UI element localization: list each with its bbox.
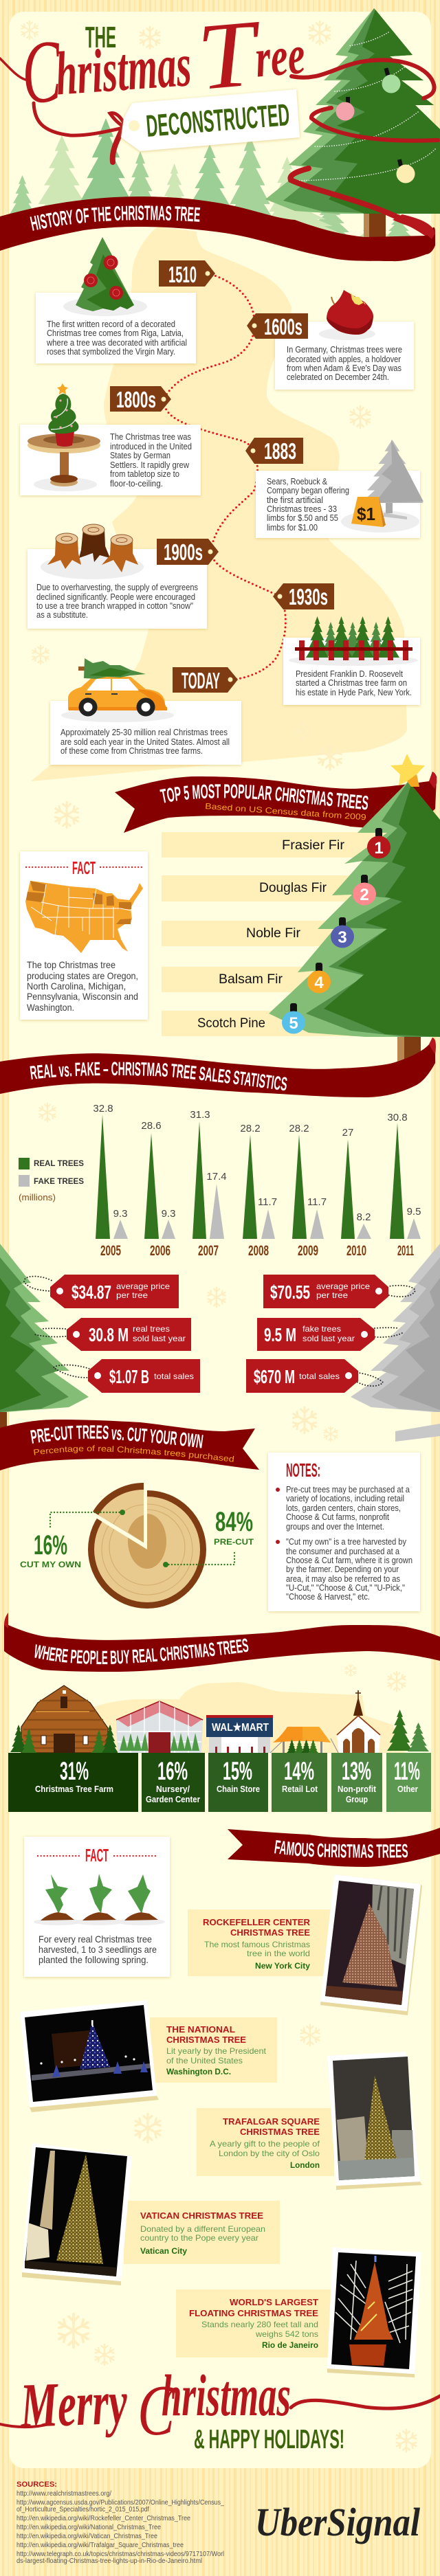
icon: snow xyxy=(41,555,144,579)
notes card xyxy=(268,1453,420,1611)
tag: real sales: total sales xyxy=(154,1371,194,1381)
merry christmas ribbon xyxy=(0,2396,440,2427)
fact card: map: North Carolina, Michigan, xyxy=(27,981,126,992)
ornament 1: 1 xyxy=(374,839,384,858)
trees: right of church xyxy=(387,1710,429,1751)
16 percent slice xyxy=(93,1483,144,1543)
text: Christmas tree comes from Riga, Latvia, xyxy=(47,328,184,338)
fact heading: FACT xyxy=(72,858,96,878)
tag: 1900s: 1900s xyxy=(164,539,203,565)
photo: national xyxy=(20,2000,159,2112)
card: today: Approximately 25-30 million real Christmas trees xyxy=(60,728,228,737)
icon: fence xyxy=(295,640,412,660)
famous: trafalgar: TRAFALGAR SQUARE xyxy=(223,2116,320,2127)
stat: other: Other xyxy=(397,1784,418,1794)
famous: rio: Stands nearly 280 feet tall and xyxy=(201,2320,318,2329)
photo: vatican xyxy=(22,2143,132,2285)
card: 1883: the first artificial xyxy=(267,495,323,505)
tag: 1883: 1883 xyxy=(264,438,296,464)
icon: price sign xyxy=(351,497,386,527)
stat: tree farm xyxy=(8,1753,138,1812)
notes card: Choose & Cut farm, where it is grown xyxy=(286,1556,412,1565)
sources: http://en.wikipedia.org/wiki/Rockefeller_Center_Christmas_Tree xyxy=(16,2515,190,2522)
stat: non-profit: Non-profit xyxy=(338,1784,377,1794)
card: 1800s: from tabletop size to xyxy=(110,469,179,479)
map of the USA xyxy=(25,881,143,953)
sand wave behind history timeline xyxy=(31,227,407,781)
famous: rockefeller: tree in the world xyxy=(247,1949,310,1958)
notes card: groups and over the Internet. xyxy=(286,1522,384,1532)
icon: tree stumps xyxy=(47,524,138,572)
sources: http://en.wikipedia.org/wiki/National_Christmas_Tree xyxy=(16,2524,161,2531)
legend xyxy=(19,1158,84,1202)
label: 16 percent: CUT MY OWN xyxy=(20,1560,81,1569)
years: 2011 xyxy=(397,1243,414,1259)
tag: real sold: real trees xyxy=(133,1324,170,1334)
stat bars: where people buy xyxy=(8,1753,431,1812)
icon: snow xyxy=(34,478,97,491)
years: 2008 xyxy=(248,1243,269,1259)
card: 1883: limbs for $.50 and 55 xyxy=(267,513,338,523)
stat: nursery: 16% xyxy=(157,1757,188,1785)
banner: real vs fake: REAL vs. FAKE – CHRISTMAS TREE SALES STATISTICS xyxy=(30,1062,287,1091)
text: roses that symbolized the Virgin Mary. xyxy=(47,347,175,357)
ornament 2: 2 xyxy=(360,886,369,904)
stat: nursery xyxy=(142,1753,205,1812)
photo: trafalgar xyxy=(327,2052,422,2190)
photo: rockefeller xyxy=(320,1874,422,2015)
sources: http://en.wikipedia.org/wiki/Vatican_Christmas_Tree xyxy=(16,2533,157,2540)
famous: trafalgar: A yearly gift to the people of xyxy=(210,2139,320,2149)
card: 1883: Company began offering xyxy=(267,486,349,495)
tag: fake price xyxy=(263,1275,388,1308)
notes card: Choose & Cut farms, nonprofit xyxy=(286,1512,389,1522)
ornament: pink xyxy=(336,97,355,121)
values: 8.2 xyxy=(357,1211,371,1223)
tag: fake sales: total sales xyxy=(299,1371,340,1381)
famous: national: THE NATIONAL xyxy=(166,2024,235,2035)
card: 1600s: celebrated on December 24th. xyxy=(287,372,389,382)
tag: 1510: 1510 xyxy=(168,262,197,287)
ornament 5 xyxy=(282,1003,305,1033)
famous: rio: weighs 542 tons xyxy=(255,2329,318,2339)
tree: fake (right) xyxy=(351,1244,440,1442)
stat: tree farm: 31% xyxy=(60,1757,89,1785)
icon: snow xyxy=(289,655,418,666)
top 5 tree xyxy=(269,754,440,1037)
card: 1800s: The Christmas tree was xyxy=(110,432,191,442)
card: 1800s: introduced in the United xyxy=(110,442,192,451)
bar chart: real vs fake xyxy=(19,1103,421,1259)
icon: artificial tree xyxy=(361,440,424,519)
famous: vatican: VATICAN CHRISTMAS TREE xyxy=(140,2210,263,2221)
legend: (millions) xyxy=(19,1193,56,1202)
card: 1900s: declined significantly. People were encouraged xyxy=(36,592,195,602)
banner: history xyxy=(0,197,435,261)
fact card: map xyxy=(20,851,148,1020)
sources: http://www.agcensus.usda.gov/Publications/2007/Online_Highlights/Census_ xyxy=(16,2499,224,2507)
famous: trafalgar: London by the city of Oslo xyxy=(219,2149,320,2158)
sand hill behind buildings xyxy=(82,1682,406,1753)
values: 11.7 xyxy=(258,1196,277,1208)
fact card: map: Pennsylvania, Wisconsin and xyxy=(27,991,138,1002)
real tree triangles xyxy=(96,1115,404,1239)
icon: car with tree xyxy=(68,658,167,716)
title: THE: THE xyxy=(85,21,116,54)
card: today: of these come from Christmas tree farms. xyxy=(60,746,203,756)
famous: rockefeller: The most famous Christmas xyxy=(204,1940,310,1949)
banner: pre-cut xyxy=(0,1420,259,1470)
title: Tree: ree xyxy=(253,25,307,89)
tag: real price: per tree xyxy=(116,1290,148,1300)
tag: 1930s: 1930s xyxy=(289,584,328,609)
icon: snow xyxy=(319,328,375,340)
fact card: seedlings: FACT xyxy=(85,1845,109,1866)
sources: http://www.realchristmastrees.org/ xyxy=(16,2490,111,2498)
banner: top 5: Based on US Census data from 2009 xyxy=(205,801,367,822)
famous: national: Lit yearly by the President xyxy=(166,2046,267,2056)
tag: fake sold xyxy=(257,1318,375,1351)
title: Christmas: hristmas xyxy=(54,31,193,109)
84 percent log xyxy=(88,1490,206,1609)
banner: real vs fake xyxy=(0,1038,436,1097)
tag: real price: average price xyxy=(116,1281,170,1291)
legend: FAKE TREES xyxy=(34,1178,84,1186)
building: church xyxy=(337,1690,380,1753)
stat: retail lot: Retail Lot xyxy=(282,1784,318,1794)
values: 9.3 xyxy=(162,1208,175,1220)
tag: today: TODAY xyxy=(182,668,220,693)
famous: rio: WORLD'S LARGEST xyxy=(230,2297,318,2307)
tag: 1883 xyxy=(245,438,303,464)
notes card: NOTES: xyxy=(286,1459,320,1481)
stat: non-profit xyxy=(331,1753,382,1812)
notes card: area, it may also be referred to as xyxy=(286,1574,400,1584)
sources xyxy=(16,2480,224,2565)
label: 84 percent: 84% xyxy=(215,1507,253,1537)
building: walmart: WAL★MART xyxy=(212,1722,269,1734)
fact card: seedlings: harvested, 1 to 3 seedlings are xyxy=(38,1944,157,1955)
big christmas tree xyxy=(265,8,440,244)
icon: tree farm xyxy=(306,616,399,658)
card: 1883: Sears, Roebuck & xyxy=(267,477,328,486)
values: 9.3 xyxy=(113,1208,127,1220)
tag: 1600s xyxy=(247,313,308,339)
stat: tree farm: Christmas Tree Farm xyxy=(35,1784,113,1794)
icon: snow xyxy=(63,297,147,316)
building: retail lot tent xyxy=(270,1727,338,1753)
building: greenhouse xyxy=(116,1701,203,1753)
banner: top 5 xyxy=(115,772,437,833)
tag: fake sold: sold last year xyxy=(302,1334,355,1343)
ornament: green xyxy=(382,67,400,93)
fake tree triangles xyxy=(113,1184,421,1239)
tree: real (left) xyxy=(0,1244,89,1433)
tag: fake price: per tree xyxy=(316,1290,348,1300)
ornament 5: 5 xyxy=(289,1014,298,1033)
stat: non-profit: Group xyxy=(346,1794,368,1804)
fact card: map: Washington. xyxy=(27,1002,74,1013)
values: 11.7 xyxy=(307,1196,327,1208)
famous: rio xyxy=(176,2248,421,2377)
notes card: "Choose & Harvest," etc. xyxy=(286,1592,370,1602)
banner: top 5: TOP 5 MOST POPULAR CHRISTMAS TREES xyxy=(160,784,368,809)
tag: fake sold: 9.5 M xyxy=(264,1324,296,1345)
ornament 4 xyxy=(307,963,331,994)
notes card: "U-Cut," "Choose & Cut," "U-Pick," xyxy=(286,1583,405,1593)
chart: log slice pie xyxy=(20,1477,254,1609)
ornament 3 xyxy=(331,917,354,948)
famous: vatican: country to the Pope every year xyxy=(140,2233,258,2243)
card: 1930s: started a Christmas tree farm on xyxy=(296,678,407,688)
card: 1800s: States by German xyxy=(110,451,170,460)
sources: SOURCES: xyxy=(16,2480,57,2489)
top 5 bars xyxy=(162,832,440,1036)
stat: other xyxy=(386,1753,431,1812)
famous: national: Washington D.C. xyxy=(166,2067,231,2076)
connector: pre-cut xyxy=(164,1551,234,1567)
tree names: Douglas Fir xyxy=(259,881,327,895)
famous: rockefeller xyxy=(188,1874,422,2015)
price tag strings xyxy=(24,1277,415,1386)
stat: retail lot xyxy=(272,1753,327,1812)
tag: real sales xyxy=(88,1359,200,1393)
price tags xyxy=(50,1275,388,1393)
ornament 1 xyxy=(367,828,390,859)
card: 1930s: President Franklin D. Roosevelt xyxy=(296,669,403,679)
background forest xyxy=(7,118,416,244)
icon: apple xyxy=(327,290,373,335)
values xyxy=(93,1103,421,1223)
values: 30.8 xyxy=(387,1112,408,1123)
title: Christmas: C xyxy=(19,21,65,123)
card: 1800s xyxy=(20,383,201,495)
card: 1600s: In Germany, Christmas trees were xyxy=(287,345,402,355)
famous: national xyxy=(20,2000,277,2112)
famous: national: of the United States xyxy=(166,2056,243,2065)
gap between slices xyxy=(72,1477,147,1549)
stat: chain store: 15% xyxy=(223,1757,252,1785)
famous: vatican: Vatican City xyxy=(140,2246,187,2256)
stat: chain store xyxy=(208,1753,268,1812)
building: barn xyxy=(10,1685,118,1753)
card: 1900s: as a substitute. xyxy=(36,610,88,620)
values: 28.2 xyxy=(240,1123,261,1134)
sources: http://www.telegraph.co.uk/topics/christmas/christmas-videos/9717107/Worl xyxy=(16,2551,224,2558)
sources: ds-largest-floating-Christmas-tree-lights-up-in-Rio-de-Janeiro.html xyxy=(16,2557,202,2565)
tree names: Balsam Fir xyxy=(219,972,283,987)
title ribbon xyxy=(0,58,438,237)
stat: non-profit: 13% xyxy=(342,1757,371,1785)
stat: retail lot: 14% xyxy=(284,1757,314,1785)
tag: real sold xyxy=(67,1318,191,1351)
gift tag: deconstructed: DECONSTRUCTED xyxy=(145,97,291,144)
closing: Christmas: C xyxy=(138,2370,176,2450)
tag: today xyxy=(173,667,238,693)
banner: pre-cut: Percentage of real Christmas trees purchased xyxy=(34,1445,234,1462)
banner: famous trees: FAMOUS CHRISTMAS TREES xyxy=(274,1840,408,1858)
tag: fake sales xyxy=(246,1359,358,1393)
label: 84 percent xyxy=(214,1507,254,1547)
photo: rio xyxy=(327,2248,421,2377)
notes card: by the farmer. Depending on your xyxy=(286,1565,399,1574)
famous: rockefeller: New York City xyxy=(255,1961,310,1971)
values: 28.6 xyxy=(141,1120,162,1132)
tree names: Noble Fir xyxy=(246,926,301,941)
ornament 4: 4 xyxy=(314,974,324,992)
famous: trafalgar: London xyxy=(290,2160,320,2170)
icon: tabletop tree xyxy=(48,383,78,447)
tag: 1600s: 1600s xyxy=(264,314,302,339)
notes card: Pre-cut trees may be purchased at a xyxy=(286,1485,410,1494)
tree names: Scotch Pine xyxy=(197,1016,265,1031)
fact card: seedlings: planted the following spring. xyxy=(38,1954,148,1965)
fact card: seedlings xyxy=(24,1837,170,1977)
tag: 1930s xyxy=(273,583,334,609)
card: 1600s: from when Adam & Eve's Day was xyxy=(287,363,402,373)
years: 2009 xyxy=(298,1243,318,1259)
banner: famous trees xyxy=(228,1828,440,1867)
tag: fake sold: fake trees xyxy=(302,1324,341,1334)
label: 16 percent: 16% xyxy=(34,1530,67,1560)
banner: where people buy: WHERE PEOPLE BUY REAL CHRISTMAS TREES xyxy=(34,1638,249,1664)
card: 1510 xyxy=(36,237,196,363)
banner: pre-cut: PRE-CUT TREES vs. CUT YOUR OWN xyxy=(30,1425,204,1448)
notes card: variety of locations, including retail xyxy=(286,1494,404,1503)
tag: real price: $34.87 xyxy=(72,1281,111,1303)
fact card: seedlings: For every real Christmas tree xyxy=(38,1934,152,1945)
closing: Christmas: hristmas xyxy=(162,2362,291,2428)
famous: national: CHRISTMAS TREE xyxy=(166,2035,246,2045)
icon: rose tree xyxy=(76,237,134,311)
notes card: the consumer and purchased at a xyxy=(286,1547,399,1556)
years: 2007 xyxy=(198,1243,219,1259)
ribbon tail over history banner xyxy=(393,214,435,239)
notes card: "Cut my own" is a tree harvested by xyxy=(286,1537,407,1547)
famous: vatican xyxy=(22,2143,280,2285)
tag: 1800s: 1800s xyxy=(116,387,156,412)
fact card: map: The top Christmas tree xyxy=(27,959,116,970)
banner: where people buy xyxy=(4,1613,440,1672)
logo: uber signal: UberSignal xyxy=(255,2500,421,2544)
famous: vatican: Donated by a different European xyxy=(140,2224,265,2234)
tree names: Frasier Fir xyxy=(282,838,345,853)
values: 31.3 xyxy=(190,1109,210,1121)
text: The first written record of a decorated xyxy=(47,320,175,329)
icon: seedlings xyxy=(34,1874,165,1925)
building: walmart xyxy=(206,1715,273,1753)
icon: price sign: $1 xyxy=(357,504,375,524)
text xyxy=(46,320,187,357)
label: 16 percent xyxy=(20,1530,81,1569)
sources: http://en.wikipedia.org/wiki/Trafalgar_Square_Christmas_tree xyxy=(16,2542,184,2549)
values: 28.2 xyxy=(289,1123,309,1134)
card: 1800s: Settlers. It rapidly grew xyxy=(110,460,190,470)
famous: rockefeller: ROCKEFELLER CENTER xyxy=(203,1917,311,1927)
famous: rockefeller: CHRISTMAS TREE xyxy=(230,1927,310,1938)
card: 1883 xyxy=(256,440,424,538)
sources: of_Horticulture_Specialties/hortic_2_015_015.pdf xyxy=(16,2506,149,2513)
ornament 3: 3 xyxy=(338,928,347,947)
stat: nursery: Garden Center xyxy=(146,1794,200,1804)
fact card: map: producing states are Oregon, xyxy=(27,970,138,981)
icon: snow xyxy=(61,708,174,722)
connector: cut my own xyxy=(50,1510,125,1527)
text: where a tree was decorated with artificial xyxy=(46,338,187,348)
years xyxy=(100,1243,414,1259)
card: 1900s: to use a tree branch wrapped in cotton "snow" xyxy=(36,601,193,611)
values: 9.5 xyxy=(407,1206,421,1218)
famous: trafalgar: CHRISTMAS TREE xyxy=(240,2127,320,2137)
star xyxy=(390,754,425,787)
famous: rio: FLOATING CHRISTMAS TREE xyxy=(189,2308,318,2318)
card: 1883: Christmas trees - 33 xyxy=(267,504,337,514)
values: 27 xyxy=(342,1127,353,1139)
ornament 2 xyxy=(353,875,376,906)
values: 32.8 xyxy=(93,1103,113,1115)
famous: trafalgar xyxy=(197,2052,422,2190)
tag: fake price: average price xyxy=(316,1281,370,1291)
tag: real sold: 30.8 M xyxy=(89,1324,129,1345)
card: 1930s xyxy=(283,616,420,705)
card: 1900s: Due to overharvesting, the supply of evergreens xyxy=(36,583,198,592)
timeline tags xyxy=(110,260,334,693)
title: Tree: T xyxy=(193,0,266,110)
tag: real sold: sold last year xyxy=(133,1334,186,1343)
card: 1883: limbs for $1.00 xyxy=(267,523,318,533)
tag: fake price: $70.55 xyxy=(270,1281,310,1303)
notes card: lots, garden centers, chain stores, xyxy=(286,1503,401,1513)
label: 84 percent: PRE-CUT xyxy=(214,1537,254,1547)
tree trunk: top 5 xyxy=(397,1034,421,1065)
values: 17.4 xyxy=(206,1171,227,1183)
tree names xyxy=(197,838,345,1031)
timeline dotted path xyxy=(164,273,285,680)
banner: history: HISTORY OF THE CHRISTMAS TREE xyxy=(30,205,201,231)
card: 1900s xyxy=(28,524,207,629)
stat: nursery: Nursery/ xyxy=(156,1784,190,1794)
years: 2010 xyxy=(346,1243,366,1259)
card: 1930s: his estate in Hyde Park, New York. xyxy=(296,688,412,697)
trunk xyxy=(364,210,386,244)
gift tag: deconstructed xyxy=(121,89,300,151)
card: 1800s: floor-to-ceiling. xyxy=(110,479,163,489)
closing: Merry: Merry xyxy=(19,2367,129,2441)
tag: fake sales: $670 M xyxy=(254,1366,295,1387)
ornament: cream xyxy=(396,159,415,183)
card: 1600s xyxy=(275,290,414,390)
tag: real sales: $1.07 B xyxy=(109,1366,149,1387)
icon: table xyxy=(28,434,100,486)
card: 1600s: decorated with apples, a holdover xyxy=(287,355,401,364)
icon: snow xyxy=(341,511,419,533)
card: today xyxy=(50,658,241,765)
card: today: are sold each year in the United States. Almost all xyxy=(60,737,230,747)
famous: rio: Rio de Janeiro xyxy=(262,2340,318,2350)
stat: chain store: Chain Store xyxy=(217,1784,260,1794)
tag: real price xyxy=(50,1275,179,1308)
years: 2005 xyxy=(100,1243,121,1259)
legend: REAL TREES xyxy=(34,1160,84,1168)
years: 2006 xyxy=(150,1243,170,1259)
